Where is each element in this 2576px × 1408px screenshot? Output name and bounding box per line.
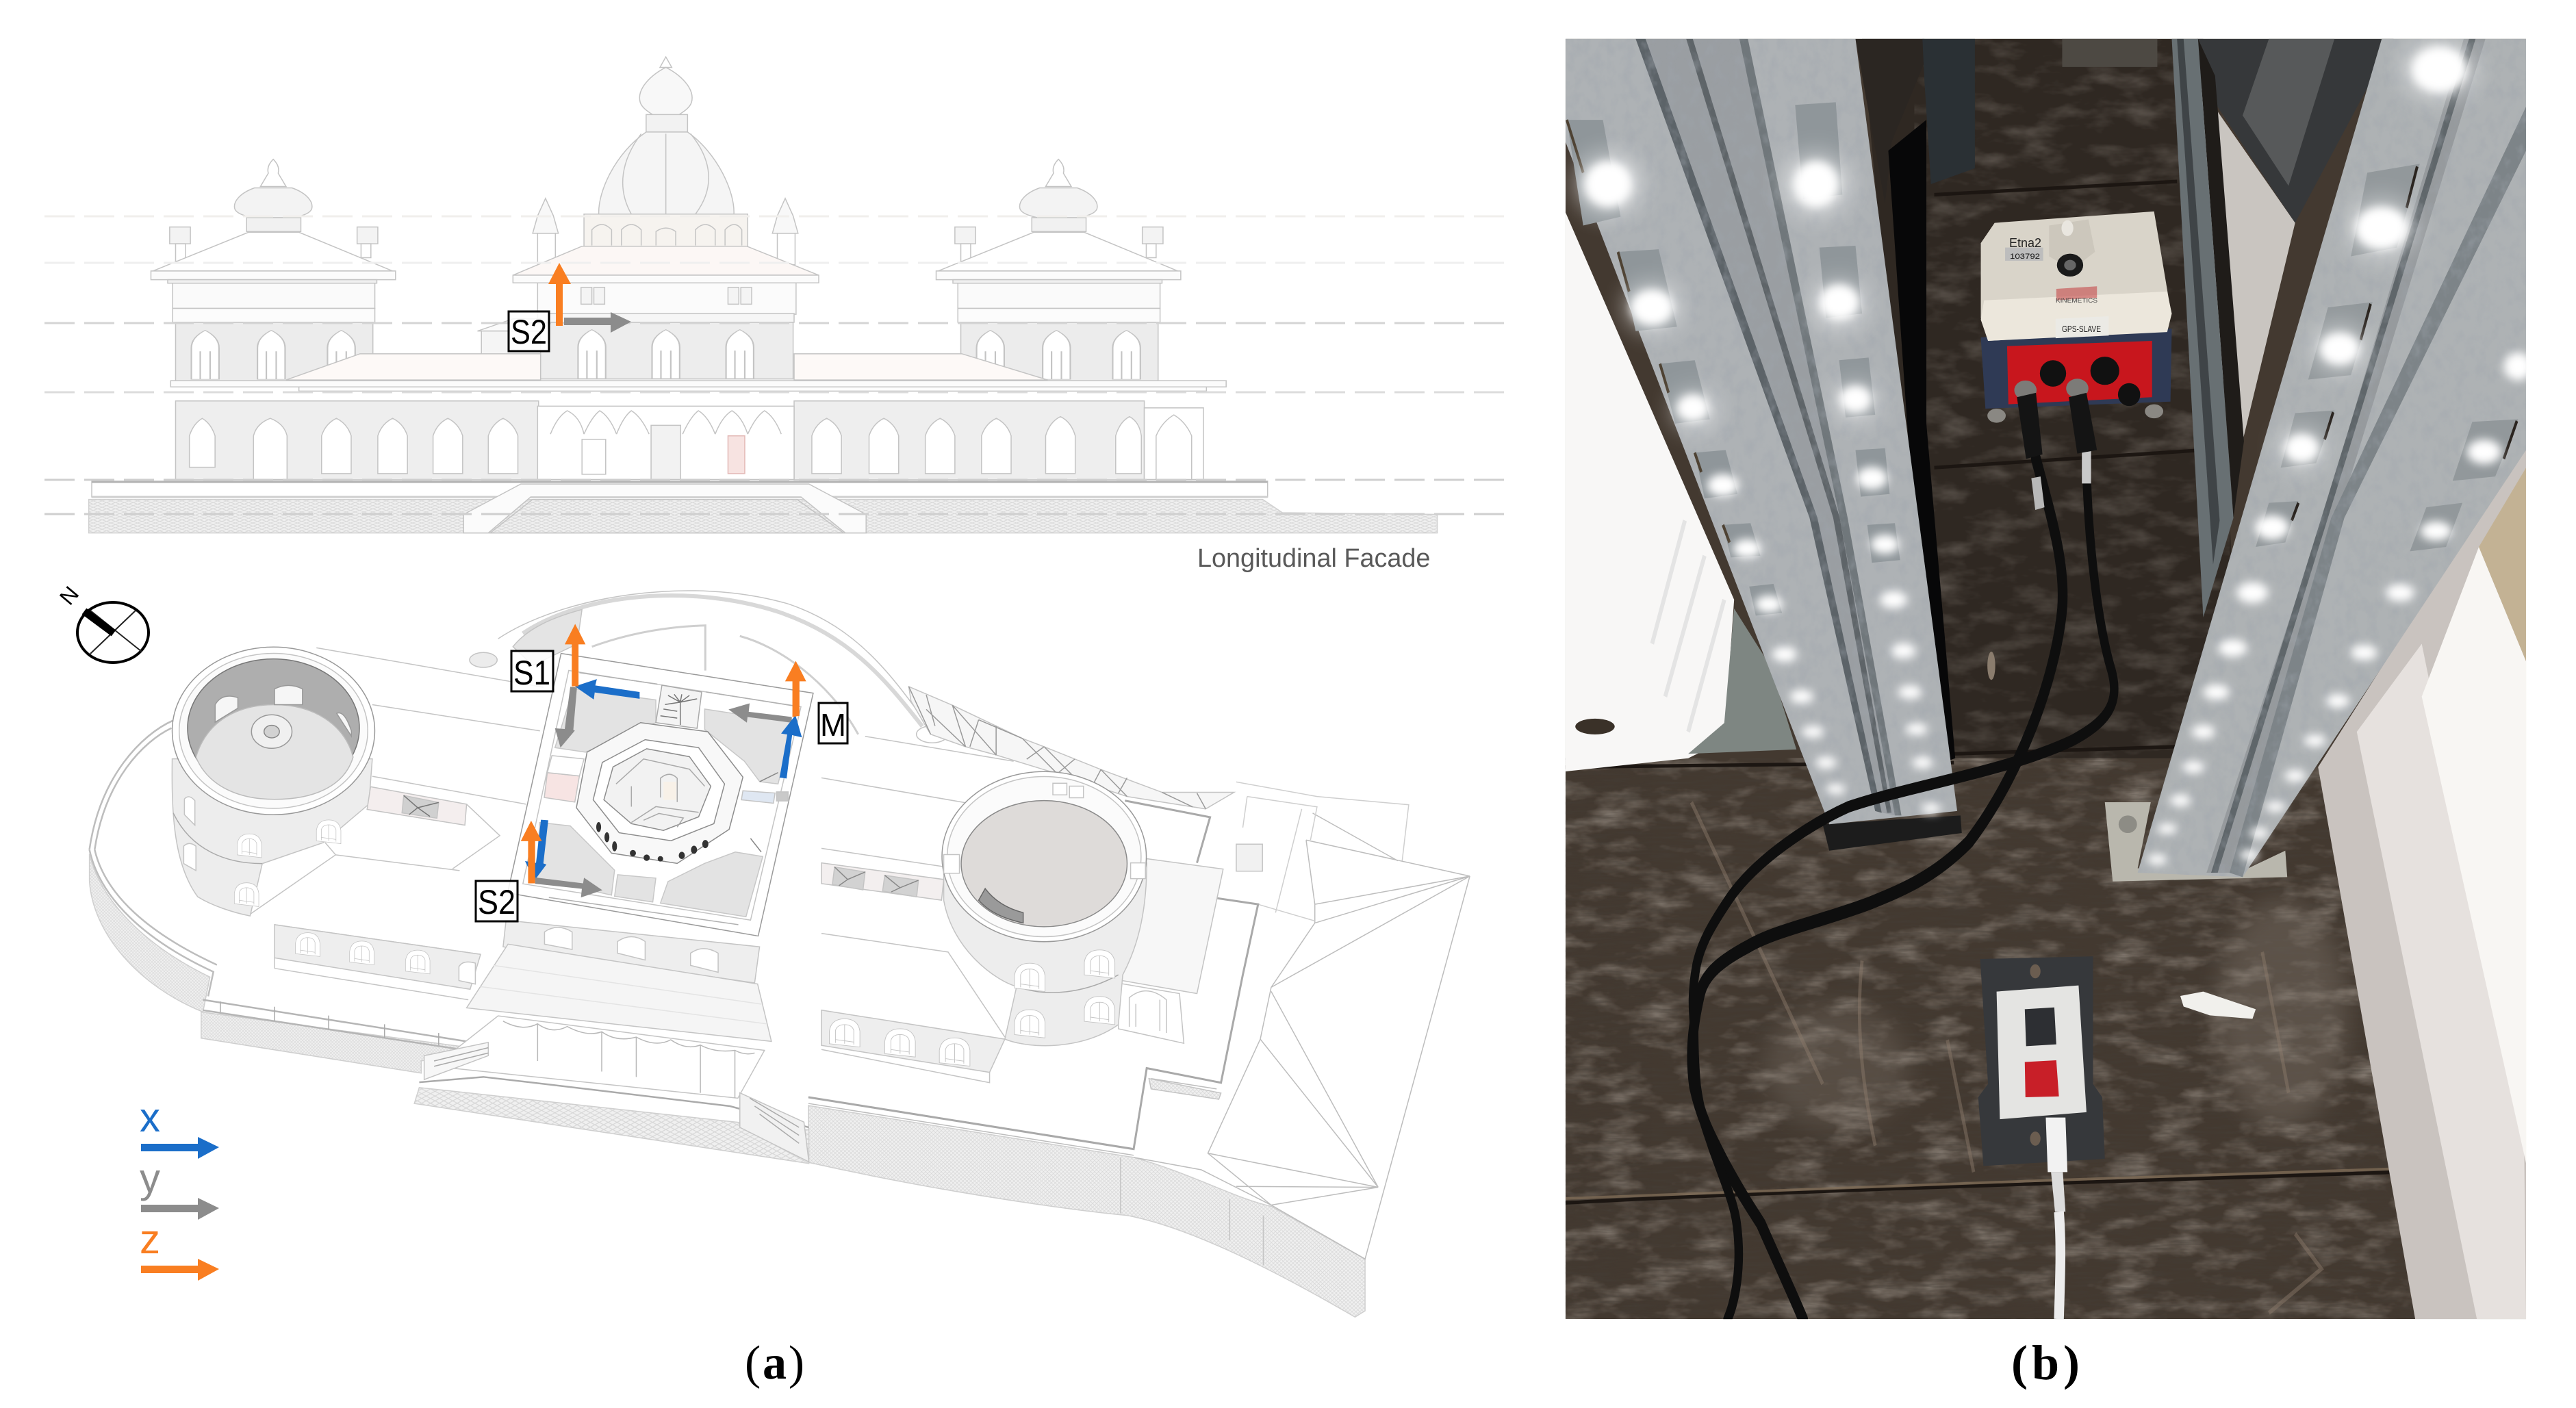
central courtyard block [508,654,813,936]
white box on left [1566,212,1734,771]
wooden floor [1566,39,2526,1319]
west wing wall with windows [275,925,481,1000]
strain relief sleeve [2082,450,2091,483]
rail slits [1567,120,1729,543]
hatched retaining wall [808,1105,1365,1317]
rooms [544,773,579,802]
Etna2 label text: Etna2 [2009,236,2041,250]
white wireless sensor on mount [1978,956,2105,1319]
legend y [140,1155,219,1220]
east wing wall with windows [821,1010,1005,1083]
rail dimple halos [2280,42,2476,468]
rail bright dimples [1585,162,1941,814]
y axis arrow [564,312,631,333]
legend z: z [140,1216,160,1262]
hatched floor areas [537,689,793,917]
caption (a): (a) [745,1337,804,1390]
rail slits [2292,166,2517,520]
cables [1692,459,2114,1319]
floor plate under right rail [2105,802,2287,882]
east loggia [821,863,944,900]
cable two [1693,468,2114,1319]
rail mottling [2124,39,2532,884]
central dome and tower [477,57,819,379]
stair and tree [656,685,702,728]
curved parapet [90,720,173,849]
hatched base wall [89,500,1438,533]
right wall skirting [2318,441,2526,1319]
hatched central wall [414,1088,809,1164]
side roofs [286,354,541,380]
sensor axes [521,624,806,897]
cable one [1692,459,2063,1319]
back arcs [470,591,948,743]
east half of the building [808,687,1470,1317]
cornice bands [170,381,1226,387]
roof planes on the right [1134,813,1470,1259]
M x arrow [780,715,802,778]
legend z [140,1216,219,1281]
hatched curved wall [90,854,210,1012]
rail tabs [1567,102,1900,615]
arched porch [1119,983,1184,1043]
rail mottling [1608,42,1948,816]
west half of the building [90,647,544,1073]
S1 x arrow [575,679,639,700]
rail tabs [2256,164,2518,551]
icon: north compass [55,582,149,663]
lower storey walls [175,401,539,480]
west tower body [172,759,372,916]
entrance stairs [463,484,866,533]
right tower [936,159,1181,382]
legend y: y [140,1155,160,1201]
west tower ring and dome [173,647,374,815]
facade elevation linework [89,57,1438,533]
S1 y arrow [555,687,577,747]
panel: photo of instruments [1566,39,2533,1390]
label: Longitudinal Facade: Longitudinal Facade [1197,544,1430,573]
truss net [909,687,1234,809]
annex roof [1101,859,1223,993]
central front roof [467,944,771,1041]
Etna2 label text: KINEMETICS [2056,297,2097,304]
sensor tag S2: S2 [478,883,515,921]
z axis arrow [548,263,571,326]
left steel rail [1566,39,1972,851]
left tower [151,159,396,382]
plaster speck on floor [2180,992,2256,1019]
portico [419,1016,809,1162]
S2 y arrow [535,878,602,897]
icon: hole in white box [1575,719,1615,734]
S2 x arrow [525,820,548,880]
terrace [92,481,1268,497]
S1 z arrow [565,624,585,687]
legend x [140,1095,219,1159]
S2 z arrow [521,821,542,884]
rail bright dimples [2147,47,2533,865]
S2 tag: S2 [511,313,547,351]
east tower [942,771,1147,1046]
Etna2 label text: GPS-SLAVE [2062,324,2101,334]
west loggia [367,786,467,825]
photo scene [1566,39,2533,1319]
front west wall [201,1012,491,1073]
panel: axonometric section drawing [55,582,1470,1390]
sensor tag S1: S1 [513,654,550,692]
icon: north compass: N [55,582,84,609]
distant upright rail [2198,39,2244,518]
legend [140,1095,219,1281]
Etna2 label text [2009,236,2101,334]
level dashed lines [44,216,1505,514]
right steel rail [2124,39,2533,884]
sensor tag M: M [820,707,846,743]
panel: longitudinal facade drawing [44,57,1505,573]
Etna2 label text: 103792 [2010,253,2040,261]
Etna2 accelerometer [1981,212,2171,459]
rail dimple halos [1575,154,1876,428]
central front wall [503,920,760,983]
shadow and dark shelving in background [1855,38,1924,112]
octagons [576,723,743,863]
M z arrow [785,661,806,717]
parapets [808,801,1258,1149]
M y arrow [728,704,792,723]
east wing roof lines [821,737,1014,1037]
caption (b): (b) [2011,1335,2080,1390]
west roof lines [250,648,544,954]
dark arch windows [596,822,709,862]
central front: roof, portico and stairs [414,920,809,1164]
sensor S2 on facade [509,263,631,351]
far terrace outline [1236,782,1409,921]
dark band and wall upper right [2197,39,2393,223]
legend x: x [140,1095,160,1140]
